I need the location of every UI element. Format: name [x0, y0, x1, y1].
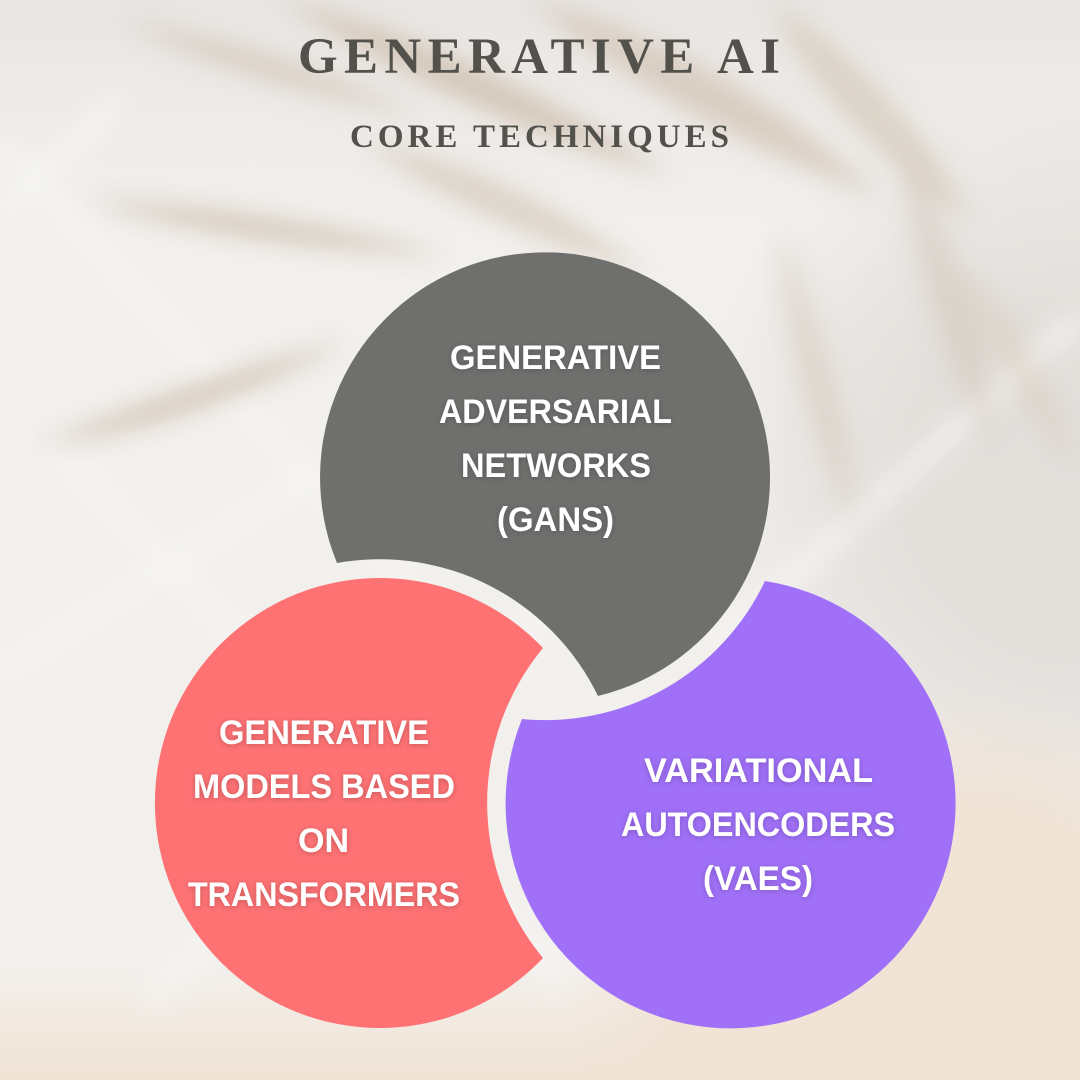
label: VAEs: AUTOENCODERS: [621, 806, 895, 844]
circle: generative adversarial networks: [320, 252, 770, 696]
label: transformers: GENERATIVE: [219, 714, 429, 752]
label: transformers: MODELS BASED: [193, 768, 455, 806]
label: transformers: ON: [298, 822, 349, 860]
label: GANs: NETWORKS: [461, 447, 651, 485]
circle: transformer-based models: [155, 578, 543, 1028]
label: VAEs: (VAES): [703, 860, 813, 898]
subtitle: CORE TECHNIQUES: [350, 119, 729, 155]
label: transformers: TRANSFORMERS: [188, 876, 460, 914]
circle: variational autoencoders: [506, 581, 956, 1028]
label: GANs: (GANS): [497, 501, 614, 539]
label: GANs: [439, 339, 672, 539]
label: transformers: [188, 714, 460, 914]
label: VAEs: VARIATIONAL: [644, 752, 873, 790]
label: GANs: ADVERSARIAL: [439, 393, 672, 431]
title: GENERATIVE AI: [298, 29, 780, 85]
label: VAEs: [621, 752, 895, 898]
label: GANs: GENERATIVE: [450, 339, 661, 377]
